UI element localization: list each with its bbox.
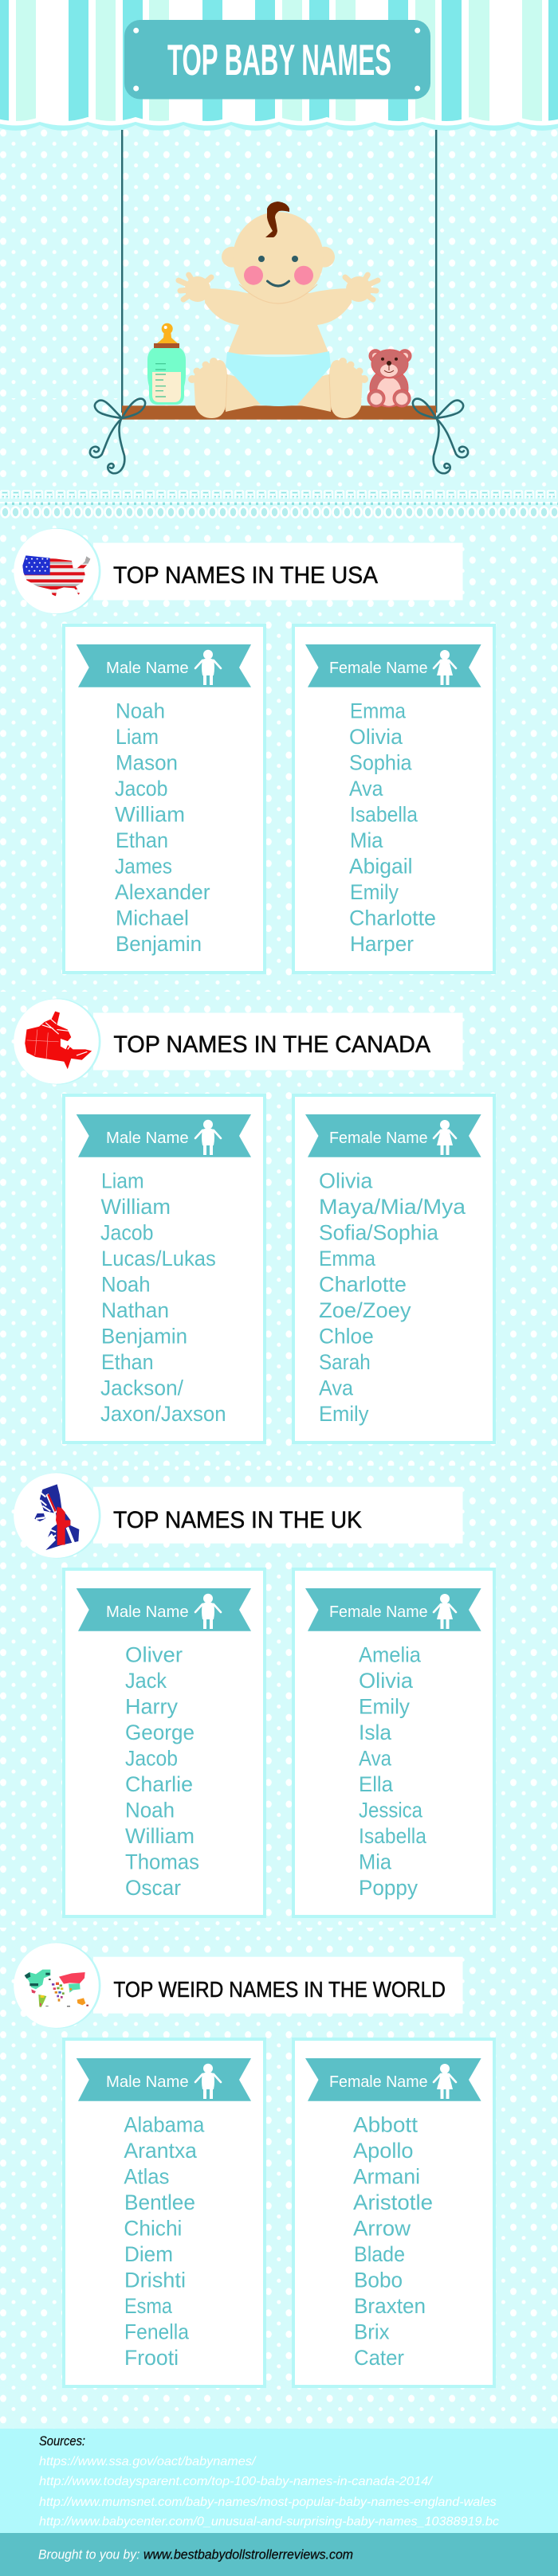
- male names list: Mason: [116, 750, 178, 774]
- male names list: Ethan: [101, 1350, 154, 1374]
- ribbon: male name: [77, 1114, 251, 1157]
- ribbon: male name: Male Name: [106, 2073, 189, 2091]
- ribbon: male name: [77, 644, 251, 687]
- male names list: Ethan: [116, 828, 168, 852]
- title: TOP BABY NAMES: [167, 35, 391, 84]
- icon: USA flag map: [22, 555, 92, 597]
- female names list: Brix: [354, 2320, 390, 2343]
- swing with baby illustration: [90, 130, 468, 473]
- female names list: Charlotte: [319, 1273, 407, 1297]
- male names list: Oscar: [125, 1876, 181, 1900]
- female names list: Aristotle: [353, 2190, 433, 2214]
- female names list: Isla: [359, 1721, 391, 1744]
- ribbon: male name: Male Name: [106, 660, 189, 677]
- baby: [179, 202, 378, 418]
- female names list: Isabella: [350, 802, 418, 826]
- female names list: Emily: [359, 1695, 411, 1719]
- male names list: Liam: [101, 1169, 144, 1193]
- heading bar: World: [14, 1943, 462, 2029]
- female names list: Arrow: [353, 2216, 411, 2240]
- male names list: [100, 1169, 226, 1426]
- ribbon: male name: Male Name: [106, 1603, 189, 1621]
- icon: Canada map: [25, 1012, 92, 1069]
- ribbon: female name: [305, 1114, 481, 1157]
- female names list: Sophia: [349, 750, 412, 774]
- icon: ribbon bow right: [413, 399, 468, 473]
- sources heading: Sources:: [39, 2433, 85, 2449]
- section: USA: [14, 528, 494, 973]
- male names list: Jacob: [100, 1220, 153, 1244]
- panel: UK female names: [293, 1569, 494, 1916]
- heading bar: Canada: TOP NAMES IN THE CANADA: [113, 1032, 430, 1058]
- icon: ribbon bow left: [90, 399, 145, 473]
- male names list: [125, 1642, 199, 1900]
- female names list: Abbott: [353, 2112, 418, 2136]
- panel: Canada male names: [64, 1095, 265, 1443]
- female names list: Emily: [350, 880, 399, 904]
- lace border: [0, 490, 558, 519]
- footer band: [0, 2533, 558, 2576]
- section: UK: [14, 1473, 494, 1916]
- female names list: Abigail: [349, 854, 413, 878]
- section: Canada: [14, 999, 494, 1443]
- icon: world map: [25, 1970, 88, 2007]
- heading bar: World: TOP WEIRD NAMES IN THE WORLD: [113, 1977, 446, 2002]
- male names list: James: [115, 854, 172, 878]
- ribbon: male name: [77, 2058, 251, 2101]
- male names list: Thomas: [125, 1850, 199, 1873]
- male names list: Diem: [124, 2242, 173, 2266]
- ribbon: male name: Male Name: [106, 1129, 189, 1147]
- female names list: Olivia: [359, 1669, 413, 1693]
- panel: USA female names: [293, 625, 494, 973]
- female names list: Ava: [349, 777, 383, 801]
- male names list: George: [125, 1721, 195, 1744]
- male names list: Chichi: [124, 2216, 182, 2240]
- ribbon: male name: [77, 1588, 251, 1631]
- male names list: Jackson/: [100, 1376, 184, 1400]
- male names list: Noah: [116, 699, 165, 722]
- female names list: Isabella: [359, 1824, 426, 1848]
- ribbon: female name: [305, 644, 481, 687]
- icon: baby bottle: [147, 323, 186, 405]
- icon: UK flag map: [34, 1484, 79, 1550]
- female names list: Zoe/Zoey: [319, 1298, 411, 1322]
- swing ropes and seat: [121, 130, 437, 420]
- male names list: Liam: [116, 725, 159, 749]
- ribbon: female name: Female Name: [329, 1603, 428, 1621]
- ribbon: female name: [305, 1588, 481, 1631]
- male names list: William: [125, 1824, 195, 1848]
- panel: World female names: [293, 2039, 494, 2386]
- source links: http://www.mumsnet.com/baby-names/most-popular-baby-names-england-wales: [39, 2496, 497, 2509]
- ribbon: female name: [305, 2058, 481, 2101]
- female names list: Mia: [350, 828, 383, 852]
- male names list: Esma: [124, 2294, 172, 2318]
- female names list: Chloe: [319, 1324, 374, 1348]
- female names list: Jessica: [359, 1799, 422, 1822]
- female names list: Olivia: [319, 1169, 373, 1193]
- male names list: Jack: [125, 1669, 167, 1693]
- source links: http://www.todaysparent.com/top-100-baby-names-in-canada-2014/: [39, 2475, 434, 2488]
- male names list: Harry: [125, 1695, 179, 1719]
- female names list: Emma: [319, 1247, 375, 1270]
- male names list: Nathan: [101, 1298, 169, 1322]
- source links: [39, 2455, 499, 2529]
- male names list: Jacob: [125, 1746, 178, 1770]
- heading bar: UK: TOP NAMES IN THE UK: [113, 1507, 362, 1533]
- male names list: Atlas: [124, 2165, 169, 2189]
- female names list: Poppy: [359, 1876, 418, 1900]
- female names list: Emma: [350, 699, 406, 722]
- female names list: Sofia/Sophia: [319, 1220, 438, 1244]
- source links: https://www.ssa.gov/oact/babynames/: [39, 2455, 257, 2468]
- male names list: Lucas/Lukas: [101, 1247, 216, 1270]
- heading bar: USA: TOP NAMES IN THE USA: [113, 562, 378, 589]
- female names list: [353, 2112, 433, 2370]
- female names list: Maya/Mia/Mya: [319, 1195, 466, 1219]
- ribbon: female name: Female Name: [329, 2073, 428, 2091]
- male names list: Bentlee: [124, 2190, 195, 2214]
- female names list: Braxten: [354, 2294, 426, 2318]
- sources band: [0, 2429, 558, 2533]
- female names list: [359, 1642, 426, 1900]
- female names list: Mia: [359, 1850, 391, 1873]
- female names list: Blade: [354, 2242, 405, 2266]
- female names list: Emily: [319, 1402, 369, 1426]
- female names list: Bobo: [354, 2269, 403, 2292]
- female names list: Harper: [350, 932, 414, 956]
- male names list: Fenella: [124, 2320, 189, 2343]
- heading bar: Canada: [14, 999, 462, 1085]
- female names list: Apollo: [353, 2139, 413, 2163]
- female names list: Cater: [354, 2346, 404, 2370]
- ribbon: female name: Female Name: [329, 1129, 428, 1147]
- female names list: [349, 699, 436, 956]
- female names list: Sarah: [319, 1350, 371, 1374]
- male names list: Alabama: [124, 2112, 205, 2136]
- male names list: Noah: [125, 1799, 175, 1822]
- male names list: Frooti: [124, 2346, 179, 2370]
- female names list: Amelia: [359, 1642, 421, 1666]
- panel: USA male names: [64, 625, 265, 973]
- male names list: Arantxa: [124, 2139, 197, 2163]
- male names list: Noah: [101, 1273, 151, 1297]
- heading bar: UK: [14, 1473, 462, 1559]
- footer credit: www.bestbabydollstrollerreviews.com: [143, 2547, 353, 2562]
- icon: teddy bear: [367, 350, 411, 407]
- male names list: William: [100, 1195, 171, 1219]
- male names list: Jaxon/Jaxson: [100, 1402, 226, 1426]
- title sign: [124, 20, 430, 99]
- male names list: [115, 699, 210, 956]
- female names list: Ava: [319, 1376, 353, 1400]
- female names list: Charlotte: [349, 906, 436, 930]
- heading bar: USA: [14, 528, 462, 614]
- female names list: [319, 1169, 466, 1426]
- male names list: William: [115, 802, 185, 826]
- male names list: Michael: [116, 906, 189, 930]
- ribbon: female name: Female Name: [329, 660, 428, 677]
- male names list: Charlie: [125, 1772, 193, 1796]
- male names list: Drishti: [124, 2269, 186, 2292]
- male names list: Oliver: [125, 1642, 183, 1666]
- panel: UK male names: [64, 1569, 265, 1916]
- awning with scallops: [0, 0, 558, 131]
- female names list: Ava: [359, 1746, 391, 1770]
- male names list: Alexander: [115, 880, 210, 904]
- footer credit: [38, 2547, 353, 2562]
- panel: Canada female names: [293, 1095, 494, 1443]
- male names list: Jacob: [115, 777, 167, 801]
- female names list: Olivia: [349, 725, 403, 749]
- male names list: Benjamin: [116, 932, 202, 956]
- female names list: Ella: [359, 1772, 393, 1796]
- male names list: [124, 2112, 205, 2370]
- footer credit: Brought to you by:: [38, 2547, 140, 2562]
- section: World: [14, 1943, 494, 2386]
- female names list: Armani: [353, 2165, 420, 2189]
- panel: World male names: [64, 2039, 265, 2386]
- male names list: Benjamin: [101, 1324, 187, 1348]
- source links: http://www.babycenter.com/0_unusual-and-surprising-baby-names_10388919.bc: [39, 2515, 499, 2529]
